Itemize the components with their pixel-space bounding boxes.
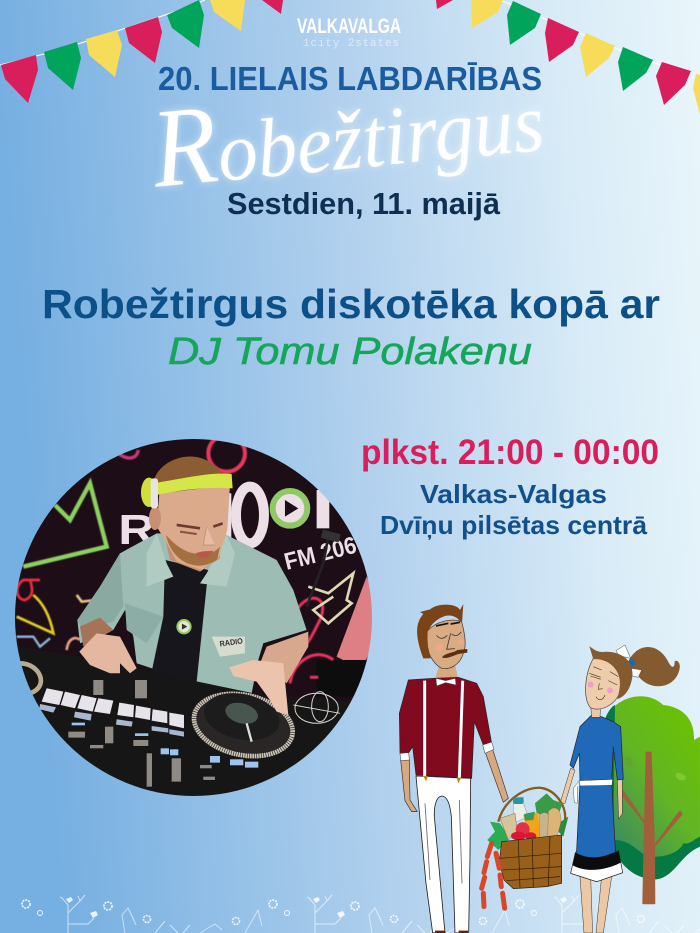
- time: plkst. 21:00 - 00:00: [361, 433, 659, 472]
- decorative folk pattern along bottom edge: [22, 895, 700, 933]
- face features: [177, 523, 223, 528]
- bottle: [513, 797, 528, 823]
- dress hem: [571, 851, 623, 882]
- apples: [516, 822, 530, 836]
- jacket: [77, 533, 307, 693]
- headphones: [153, 474, 233, 495]
- headline: Robežtirgus diskotēka kopā ar: [42, 281, 660, 327]
- bread loaves: [539, 813, 549, 839]
- shirt: [399, 677, 492, 778]
- handle: [498, 788, 565, 822]
- heading: event number: 20. LIELAIS LABDARĪBAS: [158, 60, 542, 97]
- deck screens: [72, 723, 258, 768]
- DJ name: DJ Tomu Polakenu: [168, 331, 532, 373]
- hair ribbon: [616, 645, 631, 658]
- dress: [570, 715, 623, 882]
- heading: script event name: Robežtirgus: [146, 51, 549, 212]
- illustration: woman: [560, 645, 680, 933]
- sausages: [482, 843, 505, 908]
- logo: Valka-Valga: 1city 2states: [303, 38, 399, 50]
- circular DJ photo: RADIO: [219, 636, 243, 649]
- head: [420, 640, 429, 649]
- bunting: left string of flags: [0, 0, 283, 103]
- black T-shirt: [152, 560, 208, 682]
- illustration: basket with food: [482, 788, 568, 908]
- DJ deck: [10, 647, 353, 800]
- facial features: [436, 622, 460, 626]
- head: [586, 657, 622, 709]
- wall: [15, 439, 368, 736]
- beard: [166, 535, 220, 566]
- arms: [560, 768, 575, 803]
- hair: [417, 604, 463, 658]
- illustration: tree: [604, 696, 700, 903]
- breadsticks: [500, 813, 517, 840]
- tangled cable: [293, 692, 340, 723]
- neck: [591, 705, 601, 717]
- arms: [401, 760, 417, 812]
- neck and head: [166, 542, 220, 572]
- right arm and hand: [260, 632, 308, 683]
- circular DJ photo: [10, 435, 377, 800]
- neon signs: [17, 435, 333, 683]
- illustration: man: [399, 604, 508, 933]
- jog wheel: [192, 691, 295, 759]
- orange produce: [523, 813, 540, 838]
- legs: [580, 877, 593, 933]
- bow tie: [436, 678, 456, 686]
- left arm and hand: [80, 617, 113, 647]
- logo: Valka-Valga: [297, 15, 401, 50]
- performance pads: [42, 688, 184, 728]
- circular DJ photo: FM 206: [282, 532, 359, 576]
- collar: [147, 533, 173, 587]
- badge: [177, 620, 191, 633]
- hair: [154, 456, 222, 482]
- wall lettering: R: [118, 506, 155, 553]
- neck: [435, 665, 458, 679]
- belt: [579, 779, 613, 786]
- suspenders: [425, 681, 463, 778]
- logo: Valka-Valga: VALKAVALGA: [297, 15, 401, 38]
- basket body: [499, 835, 562, 889]
- location: Dvīņu pilsētas centrā: [380, 510, 648, 540]
- trousers: [416, 776, 471, 933]
- location: [380, 479, 648, 540]
- greens: [487, 822, 510, 850]
- date: Sestdien, 11. maijā: [227, 186, 501, 221]
- location: Valkas-Valgas: [420, 479, 607, 509]
- ponytail: [628, 647, 680, 686]
- bunting: right string of flags: [436, 0, 700, 115]
